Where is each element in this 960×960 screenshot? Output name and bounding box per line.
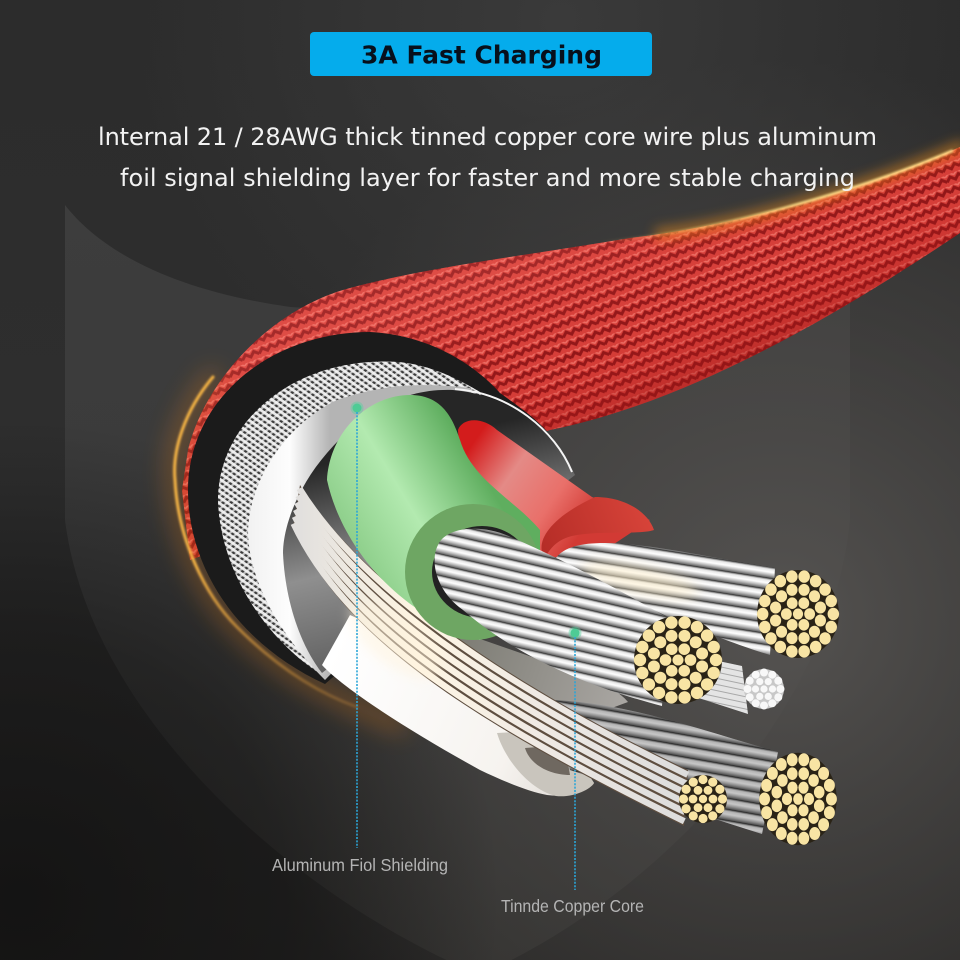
callout: aluminum foil shielding: Aluminum Fiol Shielding (272, 855, 448, 875)
copper core wire: red conductor (556, 543, 839, 658)
glow arc: left of connector (175, 377, 400, 725)
curved copper core bundle with small conductor (293, 485, 727, 826)
white signal wire (620, 640, 784, 714)
callout: tinned copper core: Tinnde Copper Core (501, 896, 644, 916)
green insulated wire (327, 395, 541, 640)
red braided cable (182, 147, 960, 560)
aluminum foil braid band (218, 361, 500, 677)
description text: lnternal 21 / 28AWG thick tinned copper core wire plus aluminum (98, 123, 877, 151)
description text (98, 123, 877, 192)
black ring (188, 332, 572, 684)
red insulated wire (458, 420, 654, 560)
callout: tinned copper core (501, 626, 644, 916)
description text: foil signal shielding layer for faster and more stable charging (120, 164, 855, 192)
title badge: 3A Fast Charging (361, 40, 602, 70)
copper core wire: green conductor (435, 529, 722, 706)
glow arc: cable top edge (600, 147, 960, 242)
grey sleeve: fourth wire (440, 625, 628, 716)
callout: aluminum foil shielding (272, 402, 448, 875)
inner cavity (283, 389, 575, 673)
white foil shielding band (248, 385, 500, 680)
title badge (310, 32, 652, 76)
copper core wire: lower right (545, 700, 837, 845)
white sleeve with end ring (322, 615, 594, 796)
